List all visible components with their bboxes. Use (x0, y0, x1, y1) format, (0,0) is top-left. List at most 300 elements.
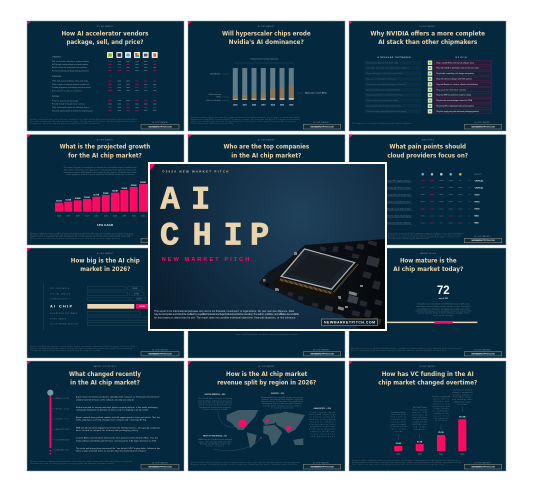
callout: Asia-Pacific: and government (310, 435, 335, 438)
comparison table: regular chipmaker vs NVIDIA: They co-build GPUs with the full software stack (436, 61, 474, 64)
footnote text: Sources: market size figures are from public reports and analyst estimates of each category in the year 2026 (30, 345, 135, 348)
timeline: AUGUST 2025 (56, 428, 69, 431)
footnote text: Sources: based on company announcements, press releases, public filings and trade publications in the period (30, 460, 132, 463)
bar chart: market size comparison: CLOUD INFRASTRUCTURE (50, 323, 79, 326)
bar chart: market size projection: 2027 (66, 215, 70, 217)
callout: Europe: lithography, and is scaling national programs (262, 402, 302, 405)
panel: vendor packaging slide: AI CHIP MARKET (97, 25, 113, 28)
maturity score: out of 100 (439, 297, 448, 300)
annotations: funding commentary: much higher values, (453, 396, 472, 399)
annotations: funding commentary: rounds (394, 430, 402, 433)
website button: NEWMARKETPITCH.COM (310, 465, 334, 468)
comparison table: regular chipmaker vs NVIDIA: They use a third-party framework (366, 78, 396, 80)
annotations: funding commentary: with sovereign funds (452, 398, 472, 401)
bar chart: market size comparison: CYBERSECURITY (50, 299, 71, 301)
bar chart: market size comparison: PET INSURANCE (50, 287, 70, 290)
panel: cover slide (148, 162, 387, 331)
callout: Asia-Pacific: ASIA-PACIFIC – 25% (314, 407, 331, 410)
bar chart: VC funding by year: $5.1B (438, 432, 444, 434)
callout: Asia-Pacific: providers invest and (310, 425, 334, 428)
table: pain point severity: MED (474, 223, 479, 225)
heading: hyperscaler chips (222, 30, 311, 46)
stacked bar chart: AI accelerator market share: GPUs (216, 97, 221, 99)
heading: projected growth (60, 144, 150, 159)
footnote text (30, 345, 135, 352)
website button: NEWMARKETPITCH.COM (471, 465, 495, 468)
paragraph: maturity commentary: and new entrants still try to attack inference and edge niches (417, 312, 469, 315)
table: pain point severity: HIGH (475, 209, 480, 211)
annotations: funding commentary: constraints (414, 428, 425, 431)
callout: Rest of the world: early clusters (206, 445, 224, 448)
table: pain point severity: Cooling and rack density limits (386, 193, 411, 196)
footnote text: Year totals include only disclosed rounds and are for illustrative purposes only (352, 463, 444, 466)
table: pain point severity: High cost of training and inference clusters (377, 186, 411, 189)
website button (141, 238, 179, 243)
bar chart: market size projection: $285B (140, 182, 146, 184)
annotations: funding commentary: Funding slowed (391, 412, 405, 414)
comparison table: regular chipmaker vs NVIDIA: They compete on price with a smaller base (366, 104, 401, 108)
callout: Europe: through public funding and data centers (263, 404, 301, 407)
panel: market size comparison slide (27, 248, 184, 358)
website button (464, 348, 502, 356)
footnote text (30, 118, 138, 125)
footnote text: This maturity score is based on market revenue, number of scaled suppliers, buyer adoption and standardization (351, 347, 461, 350)
timeline: The scale and pricing have pressured the "one default GPU" buying habit. Inference has (76, 447, 160, 450)
website button (464, 121, 502, 129)
paragraph: maturity commentary: remaining fast moving, as new workloads continue to change needs (415, 310, 471, 313)
bar chart: market size projection: 2034 (132, 215, 136, 217)
footnote text: This comparison is a simplified view based on public product information. (352, 122, 413, 125)
table: pain point severity: Networking bottlenecks across large clusters (375, 208, 411, 211)
annotations: funding commentary: capital needs (391, 423, 406, 426)
heading: complete AI stack (370, 30, 485, 46)
annotations: funding commentary: inference and (434, 400, 449, 403)
bar chart: VC funding by year: 2023 (418, 454, 422, 456)
timeline: OCTOBER 2025 (56, 439, 69, 441)
table: channels, platform and pricing rows: Sell through cloud providers as rented compute (52, 63, 88, 66)
panel: NVIDIA complete stack slide (349, 21, 506, 131)
website button: AI CHIP MARKET (313, 461, 330, 464)
website button: AI CHIP MARKET (475, 235, 491, 238)
heading: pain points: What pain points should (389, 144, 466, 151)
table: channels, platform and pricing rows: Provide proprietary networking and interconnect (52, 86, 92, 89)
table: pain point severity: HIGH (475, 194, 480, 196)
footnote text (30, 460, 132, 465)
website button: AI CHIP MARKET (475, 348, 491, 351)
timeline: have started to compete for memory and packaging priority (76, 429, 138, 432)
stacked bar chart: AI accelerator market share (206, 58, 327, 107)
callout: Europe: industrial firms. It also hosts key suppliers in (261, 400, 303, 403)
stacked bar chart: AI accelerator market share: Other accelerators (206, 99, 221, 102)
panel: hidden middle slide: Image is global footprint and is intended for reference only and may be out of date (236, 333, 298, 336)
website button: NEWMARKETPITCH.COM (148, 465, 172, 468)
disclaimer text: This report is for informational purposes only and is not financial, investment, or legal advice. Do your own due diligence. Data (154, 310, 295, 313)
table: channels, platform and pricing rows: Offer end-to-end software stack and tools (52, 80, 88, 83)
comparison table: regular chipmaker vs NVIDIA (364, 56, 492, 114)
footnote text: Ratings are indicative and are based on publicly available information (30, 122, 100, 125)
disclaimer text: for any losses or claims from its use. The report does not consider individual objectives, financial situations, or risk tolerance. (154, 316, 296, 319)
footnote text: Funding totals exclude public offerings and acquisitions; values are approximate and rounded, and may be revised (352, 461, 461, 464)
callout: Europe: in several countries (271, 406, 293, 409)
callout: Rest of the world: building new AI data centers and (200, 442, 230, 446)
heading: hyperscaler chips: Will hyperscaler chips erode (222, 30, 311, 38)
callout: North America: chip designers and hyperscale buyers (198, 399, 232, 402)
heading: pain points: cloud providers focus on? (387, 152, 468, 159)
annotations: funding commentary: interest in AI (412, 411, 428, 414)
website button: AI CHIP MARKET (475, 121, 491, 124)
table: channels, platform and pricing rows: PRICING (52, 96, 60, 98)
heading: market maturity (393, 258, 464, 273)
panel: recent changes timeline slide: MARKET OPPORTUNITY (93, 365, 117, 368)
callout: Europe (261, 393, 303, 409)
panel: cloud provider pain points slide (349, 134, 506, 245)
stacked bar chart: AI accelerator market share: % of AI accelerator market by supplier type (250, 58, 278, 61)
table: channels, platform and pricing rows: Offer subscription plans for software layers (52, 106, 89, 109)
timeline: HBM and advanced packaging have become the limiting resource, not capacity, companies (76, 426, 160, 429)
comparison table: regular chipmaker vs NVIDIA: They add libraries for science, robotics and simulation (436, 83, 478, 86)
annotations: funding commentary: inference startups at (452, 393, 473, 396)
world map with region bubbles (213, 410, 305, 451)
callout: Europe: Europe invests in sovereign AI compute and research (261, 396, 303, 399)
callout: Europe: clusters, with demand from telecoms, auto and (262, 398, 303, 401)
table: channels, platform and pricing rows: Bundle chips into integrated rack systems (52, 66, 87, 69)
timeline: Custom ASICs and merchant alternatives have gained traction beside GPUs. This has (76, 437, 158, 440)
callout: North America: across all major clouds (203, 408, 227, 411)
comparison table: regular chipmaker vs NVIDIA: They sell one chip and hope buyers build it (366, 67, 410, 70)
bar chart: VC funding by year: 2024 (439, 454, 443, 456)
bar chart: market size projection: $259B (131, 185, 137, 187)
heading: top companies: Who are the top companies (223, 144, 309, 151)
callout: North America: The United States is home to leading (198, 397, 232, 400)
subtitle: NEW MARKET PITCH (162, 257, 249, 263)
comparison table: regular chipmaker vs NVIDIA: They rely on partners to build and sell servers (366, 94, 403, 97)
table: channels, platform and pricing rows: Sell inference-only accelerators (52, 89, 82, 92)
callout: Asia-Pacific: Korea and Japan lead (309, 413, 335, 416)
panel: revenue by region slide: AI CHIP MARKET (258, 365, 275, 368)
timeline (47, 390, 160, 454)
annotations: funding commentary: adding fresh capital (454, 400, 471, 404)
website button (464, 461, 502, 469)
footnote text: Hyperscaler custom ASICs include Google TPU, Amazon Trainium, Microsoft Maia and Meta MTP programs and shipments (191, 118, 300, 121)
heading: recent changes: What changed recently (69, 371, 141, 378)
comparison table: regular chipmaker vs NVIDIA: They need a long lead time to figure out the stack (366, 83, 406, 86)
timeline: vendors have led to focus on the software, not only raw compute (76, 398, 134, 401)
table: channels, platform and pricing rows: Pricing mostly through cloud contract (52, 103, 86, 106)
title: AI CHIP: AI (160, 181, 210, 218)
table: pain point severity: Securing enough GPU supply and power (378, 180, 411, 182)
footnote text: Providers may vary by region and workload (388, 238, 428, 240)
bar chart: market size projection: 2033 (122, 215, 126, 217)
callout: Europe: EUROPE – 23% (271, 393, 285, 395)
annotations: funding commentary: favored a few (390, 425, 407, 428)
paragraph: growth commentary (64, 166, 137, 176)
heading: hyperscaler chips: Nvidia's AI dominance? (229, 39, 304, 46)
bar chart: market size projection: $177B (94, 194, 100, 196)
comparison table: regular chipmaker vs NVIDIA: They ship NIM microservices ready for clouds (436, 94, 471, 97)
annotations: funding commentary: seeking to win (434, 412, 449, 415)
comparison table: regular chipmaker vs NVIDIA: NVIDIA (456, 56, 467, 59)
footnote text: Regional revenue is attributed by buyer location, shares are rounded and the map is illustrative rather than exact (191, 463, 298, 466)
website button: AI CHIP MARKET (313, 348, 330, 351)
image: circuit board with chip (258, 239, 385, 329)
disclaimer text (154, 310, 300, 319)
annotations: funding commentary: accelerators, yet (412, 413, 428, 416)
timeline: cooling and integration as decisive as silicon, and it is shipping to all top clouds (76, 409, 148, 412)
footnote text (191, 461, 300, 466)
bar chart: market size projection: $195B (103, 193, 109, 195)
comparison table: regular chipmaker vs NVIDIA: They lock supply early with advanced packaging partners (436, 110, 479, 113)
panel: market maturity slide (349, 248, 506, 358)
heading: vendor packaging: How AI accelerator vendors (62, 30, 149, 38)
bar chart: market size projection: 2031 (104, 215, 108, 217)
footnote text: Vendors are rated on how well they currently address each buyer problem (388, 234, 463, 237)
bar chart: market size projection: $121B (56, 200, 62, 202)
title: AI CHIP: CHIP (160, 217, 269, 254)
heading: market maturity: How mature is the (400, 258, 457, 264)
annotations: funding commentary: few startups (413, 416, 427, 419)
annotations: funding commentary: large rounds (434, 407, 449, 410)
comparison table: regular chipmaker vs NVIDIA: They run libraries maintained by others (366, 99, 398, 102)
table: channels, platform and pricing rows: Promote sovereign AI deals with governments (52, 69, 89, 72)
title: AI CHIP (160, 181, 269, 254)
callout: Asia-Pacific: capacity for AI use (310, 430, 334, 433)
timeline: Export controls have pushed vendors to build region-specific chips and stacks. That has (76, 416, 160, 419)
panel: hidden middle slide (188, 248, 345, 358)
comparison table: regular chipmaker vs NVIDIA: They have the most developers trained on CUDA (436, 99, 473, 102)
website button: AI CHIP MARKET (475, 461, 491, 464)
website button: NEWMARKETPITCH.COM (471, 239, 495, 242)
timeline: MARCH 2025 (56, 397, 69, 400)
comparison table: regular chipmaker vs NVIDIA: They own the inference runtime (436, 88, 466, 91)
paragraph: maturity commentary (415, 303, 471, 317)
stacked bar chart: AI accelerator market share: 2023 (261, 105, 265, 107)
stacked bar chart: AI accelerator market share: 2020 (233, 105, 237, 107)
table: pain point severity: SEVERITY (474, 174, 483, 176)
website button: NEWMARKETPITCH.COM (148, 352, 172, 355)
annotations: funding commentary: later stage (391, 428, 406, 431)
panel: hyperscaler chips slide: AI CHIP MARKET (258, 25, 274, 28)
table: channels, platform and pricing rows: Premium per-unit pricing model (52, 99, 79, 102)
annotations: funding commentary: in AI data (435, 419, 447, 422)
callout: North America: spending and custom silicon programs (199, 406, 231, 409)
panel: VC funding slide: AI CHIP MARKET (420, 365, 436, 368)
comparison table: regular chipmaker vs NVIDIA: They lean mostly on raw silicon performance (366, 88, 400, 91)
table: pain point severity: MED (474, 216, 479, 218)
heading: projected growth: What is the projected growth (60, 144, 150, 151)
website button: NEWMARKETPITCH.COM (471, 125, 495, 128)
stacked bar chart: AI accelerator market share: NVIDIA 80%+ (210, 73, 221, 76)
website button (141, 461, 179, 469)
annotations: funding commentary: The ChatGPT boom (413, 406, 427, 409)
callout: North America: that drive most accelerator demand (198, 402, 232, 404)
heading: VC funding: How has VC funding in the AI (382, 371, 474, 378)
footnote text: Markets are defined by vendor revenue and are not directly comparable, values are rounded for presentation (30, 347, 132, 350)
timeline: taken a larger workload share, so cost per token has mattered more to buyers (76, 450, 146, 453)
heading: market size: market in 2026? (80, 266, 131, 273)
heading: revenue by region (217, 371, 317, 386)
heading: vendor packaging (62, 30, 149, 46)
stacked bar chart: AI accelerator market share: 2021 (243, 105, 247, 107)
heading: pain points (387, 144, 468, 159)
table: channels, platform and pricing rows: Discount volume deals to anchor the largest buyers (52, 109, 93, 112)
bar chart: market size projection: 2028 (76, 215, 80, 217)
bar chart: market size projection: $236B (122, 188, 128, 190)
table: channels, platform and pricing rows (52, 55, 156, 112)
footnote text: Categories may overlap and totals should only be used as a guide (30, 349, 100, 352)
website button: NEWMARKETPITCH.COM (148, 125, 172, 128)
heading: revenue by region: revenue split by region in 2026? (217, 380, 317, 386)
table: channels, platform and pricing rows: PLATFORM (52, 75, 62, 78)
heading: top companies: in the AI chip market? (231, 152, 302, 159)
panel: market size comparison slide: AI CHIP MARKET (97, 252, 113, 255)
CAGR label: 10% CAGR (97, 223, 114, 227)
callout: Asia-Pacific: China, Taiwan, South (310, 411, 335, 414)
website button: AI CHIP MARKET (152, 121, 169, 124)
callout: Rest of the world: REST OF THE WORLD – 4% (203, 435, 227, 438)
bar chart: VC funding by year: 2025 (460, 454, 464, 456)
annotations: funding commentary: investors were (391, 418, 406, 421)
callout: North America (198, 393, 232, 411)
panel: NVIDIA complete stack slide: AI CHIP MARKET (420, 25, 436, 28)
footnote text: Forecast values are illustrative and assume sustained data center investment and steady supply of packaging (30, 233, 133, 236)
heading: recent changes (69, 371, 141, 386)
website button (303, 461, 341, 469)
panel: vendor packaging slide (27, 21, 184, 131)
paragraph: growth commentary: sovereign programs, while growth is also supported by inference workloads and custom (64, 171, 137, 174)
bar chart: VC funding by year (394, 406, 466, 456)
stacked bar chart: AI accelerator market share: Other merchant (209, 93, 221, 96)
callout: Rest of the world: Middle East and Latin America are emerging (198, 438, 232, 441)
table: channels, platform and pricing rows: CHANNELS (52, 55, 62, 58)
annotations: funding commentary: raised large (412, 418, 427, 421)
footnote text (30, 232, 133, 240)
website button: AI CHIP MARKET (313, 121, 330, 124)
table: pain point severity (350, 173, 484, 225)
footnote text: Growth rate is a compound annual rate across the forecast period and actual results may differ materially (30, 235, 130, 238)
website button: NEWMARKETPITCH.COM (310, 352, 334, 355)
stacked bar chart: AI accelerator market share: Hyperscaler custom ASICs (305, 92, 327, 95)
panel: projected growth slide (27, 134, 184, 245)
bar chart: market size comparison: VIDEO GAMES (50, 317, 67, 320)
callout: Asia-Pacific (309, 407, 336, 438)
callout: Asia-Pacific: accelerators as local (309, 423, 336, 426)
panel: top companies slide (188, 134, 345, 245)
footnote text: This table summarizes how major vendors package, sell and price accelerators and may change without notice (30, 120, 135, 123)
website button (322, 319, 377, 326)
footnote text (191, 116, 300, 125)
bar chart: market size comparison: $284B (139, 305, 145, 308)
footnote text: Sources: company reports, public filings and analyst estimates of AI chip market sales and shipments by year (30, 232, 133, 235)
heading: market size (71, 258, 140, 273)
footnote text (351, 347, 461, 352)
timeline: Nvidia launched its newest and most tightly coupled platform: it has made packaging, (76, 406, 159, 409)
table: pain point severity: Utilization tracking across tenant workloads (376, 222, 411, 225)
heading: complete AI stack: Why NVIDIA offers a more complete (370, 30, 485, 38)
bar chart: market size projection: 2026 (57, 215, 61, 217)
annotations: funding commentary: rounds beside (413, 421, 427, 424)
bar chart: market size comparison: DIGITAL HEALTH (50, 292, 71, 295)
website button (303, 348, 341, 356)
stacked bar chart: AI accelerator market share: 2025 (280, 105, 284, 107)
heading: VC funding (378, 371, 478, 386)
table: channels, platform and pricing rows: Sell accelerators directly to system builders (52, 60, 89, 63)
annotations: funding commentary: architectures and (432, 405, 450, 408)
panel: recent changes timeline slide (27, 361, 184, 471)
stacked bar chart: AI accelerator market share: 2026 (289, 105, 293, 107)
bar chart: market size comparison: ENTERPRISE SOFTWARE (50, 312, 78, 315)
table: pain point severity: Custom silicon adoption and software lock-in (375, 200, 411, 203)
footnote text (352, 459, 461, 466)
timeline: JUNE 2025 (56, 419, 69, 421)
annotations: funding commentary: photonics, memory and (452, 391, 472, 394)
annotations: funding commentary: Funding accelerated (432, 395, 450, 398)
bar chart: market size comparison: AI CHIP (50, 305, 72, 309)
annotations: funding commentary: drove renewed (412, 409, 427, 412)
comparison table: regular chipmaker vs NVIDIA: A REGULAR CHIPMAKER (378, 56, 411, 59)
bar chart: VC funding by year: $1.6B (396, 443, 401, 445)
callout: North America: and set the pace for AI infrastructure (198, 404, 232, 407)
heading: top companies (223, 144, 309, 159)
heading: market size: How big is the AI chip (71, 258, 140, 264)
annotations: funding commentary: specialized (433, 403, 449, 405)
stacked bar chart: AI accelerator market share: 2024 (271, 104, 276, 107)
footnote text: Sources: public funding databases, press releases and company announcements of AI chip venture deals by year (352, 459, 460, 462)
comparison table: regular chipmaker vs NVIDIA: They ship CUDA so developers start on the same layer (436, 67, 479, 70)
table: pain point severity: CRITICAL (475, 179, 484, 182)
website button: NEWMARKETPITCH.COM (324, 320, 375, 324)
bar chart: market size projection: 2030 (94, 215, 98, 217)
maturity scale (350, 321, 477, 324)
footnote text (388, 232, 464, 240)
annotations: funding commentary: cautious, while (390, 420, 406, 423)
paragraph: growth commentary: silicon programs, even as capacity and power availability remain key constraints (66, 173, 134, 176)
footnote text: Market size includes accelerators and related silicon sold to all customer types globally (30, 237, 120, 240)
bar chart: market size projection: $146B (75, 197, 81, 200)
table: channels, platform and pricing rows: Offer an open ecosystem without vendor lock (52, 83, 89, 86)
callout: Asia-Pacific: build out large-scale (309, 428, 335, 431)
comparison table: regular chipmaker vs NVIDIA: They keep GPUs shipping fast with annual cadence (436, 104, 474, 108)
comparison table: regular chipmaker vs NVIDIA: They build chips at the best node (366, 61, 398, 64)
annotations: funding commentary: for challengers (432, 410, 450, 413)
panel: market maturity slide: MARKET SCORE (420, 252, 436, 255)
timeline: Buyers have increased accelerator spending from research to "AI factory infrastructure" (76, 396, 160, 399)
bar chart: VC funding by year: 2022 (396, 454, 400, 456)
comparison table: regular chipmaker vs NVIDIA: They have fragile, small supply chains for packaging (366, 111, 406, 113)
footnote text: Score is subjective and should be used as a relative indicator across different markets only (351, 349, 446, 352)
bar chart: market size projection: 2032 (113, 215, 117, 217)
annotations: funding commentary: after the prior (391, 413, 406, 416)
footnote text: Pain point severity reflects analyst judgment of buyer interviews and reports (388, 232, 464, 235)
bar chart: market size projection: $133B (66, 200, 72, 202)
timeline: made compliance and chip changes more complex and "sovereign AI" big (76, 419, 146, 422)
heading: complete AI stack: AI stack than other chipmakers (378, 39, 477, 46)
annotations: funding commentary: to rounds (457, 403, 467, 406)
annotations: funding commentary: NVIDIA scale (412, 423, 427, 426)
paragraph: maturity commentary: and custom designs (433, 314, 453, 317)
footnote text: Ratings are subjective and should be validated through customer calls (388, 235, 460, 238)
bar chart: market size projection: 2029 (85, 215, 89, 217)
annotations: funding commentary: share from (433, 414, 450, 417)
paragraph: maturity commentary: Demand is now established, with NVIDIA dominant in GPUs and (417, 303, 469, 306)
bar chart: market size comparison: $180B (133, 288, 138, 290)
comparison table: regular chipmaker vs NVIDIA: They sell reference designs with DGX systems (436, 78, 472, 80)
timeline: JANUARY 2026 (56, 449, 69, 452)
annotations: funding commentary: chip cycle as (390, 417, 406, 419)
label: copyright: ©2026 NEW MARKET PITCH (162, 170, 228, 174)
callout: Asia-Pacific: demand for domestic (310, 420, 334, 423)
bar chart: market size projection (55, 182, 148, 217)
callout: North America: NORTH AMERICA – 48% (205, 393, 226, 396)
